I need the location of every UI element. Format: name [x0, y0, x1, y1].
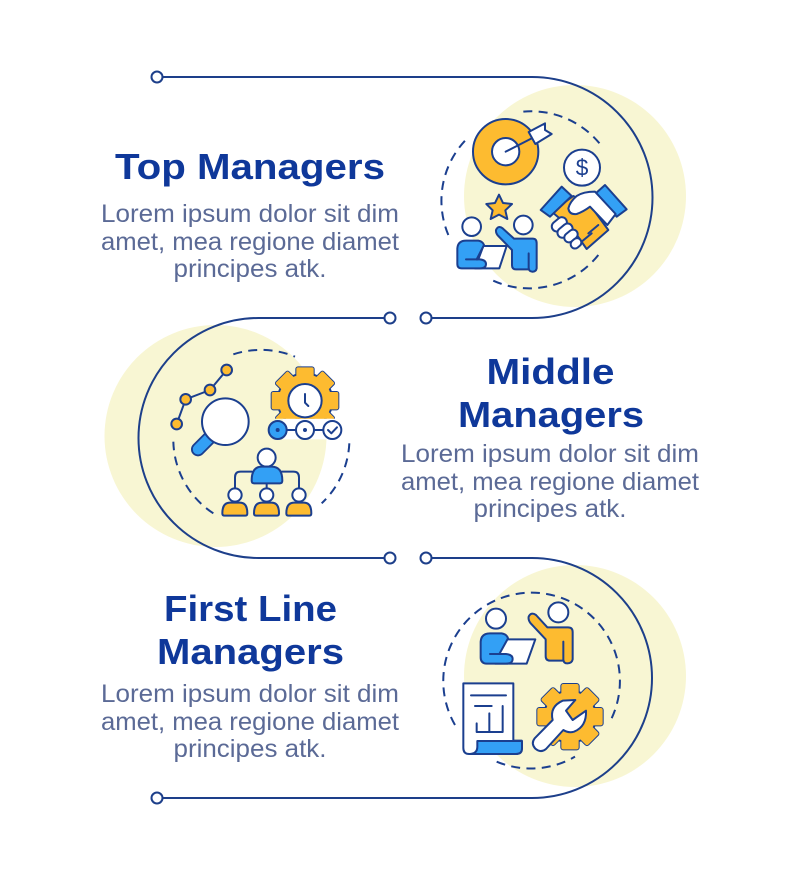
icon: trend line with magnifier [171, 365, 249, 449]
icon: org chart [222, 449, 311, 516]
body text [101, 200, 399, 283]
body text: principes atk. [174, 735, 326, 763]
heading: Managers [458, 394, 644, 435]
body text: principes atk. [474, 495, 626, 523]
top dot [420, 552, 432, 564]
icon: gear with clock [270, 366, 340, 419]
icon: two colleagues with laptop [457, 216, 537, 272]
body text: amet, mea regione diamet [401, 468, 699, 496]
heading: Top Managers [115, 146, 385, 187]
end dot [420, 312, 432, 324]
body text: Lorem ipsum dolor sit dim [101, 680, 399, 708]
infographic canvas [102, 70, 699, 804]
icon: dollar coin: $ [576, 154, 589, 180]
white band behind process steps [283, 419, 329, 439]
heading: First Line [164, 588, 337, 629]
heading [458, 351, 644, 435]
dashed ring [443, 593, 620, 769]
connector line [162, 558, 652, 798]
icon: document with chart [463, 683, 522, 754]
panel: middle managers [104, 312, 699, 564]
heading: Middle [486, 351, 614, 392]
panel: top managers [101, 72, 686, 324]
icon: process steps [269, 421, 341, 439]
panel: first line managers [101, 552, 686, 804]
background circle [464, 565, 686, 787]
icon: handshake [541, 185, 627, 250]
body text [401, 440, 699, 523]
body text: amet, mea regione diamet [101, 228, 399, 256]
icon: star [486, 195, 512, 219]
connector line [138, 318, 385, 558]
dashed ring [173, 350, 349, 513]
background circle [464, 85, 686, 307]
heading [157, 588, 344, 672]
body text: amet, mea regione diamet [101, 708, 399, 736]
body text [101, 680, 399, 763]
body text: Lorem ipsum dolor sit dim [401, 440, 699, 468]
icon: gear with wrench [533, 684, 603, 751]
heading: Managers [157, 631, 344, 672]
body text: Lorem ipsum dolor sit dim [101, 200, 399, 228]
dashed ring [441, 111, 600, 288]
icon: two colleagues with laptop [481, 602, 573, 664]
top dot [384, 312, 396, 324]
bottom dot [384, 552, 396, 564]
icon: target with arrow [473, 119, 552, 184]
icon group: first line managers [443, 593, 620, 769]
bottom dot [152, 792, 162, 804]
start dot [152, 72, 162, 82]
connector line [162, 77, 652, 318]
icon group: top managers [441, 111, 627, 288]
body text: principes atk. [174, 255, 326, 283]
icon: dollar coin [564, 150, 600, 186]
background circle [104, 325, 326, 547]
icon group: middle managers [171, 350, 349, 516]
